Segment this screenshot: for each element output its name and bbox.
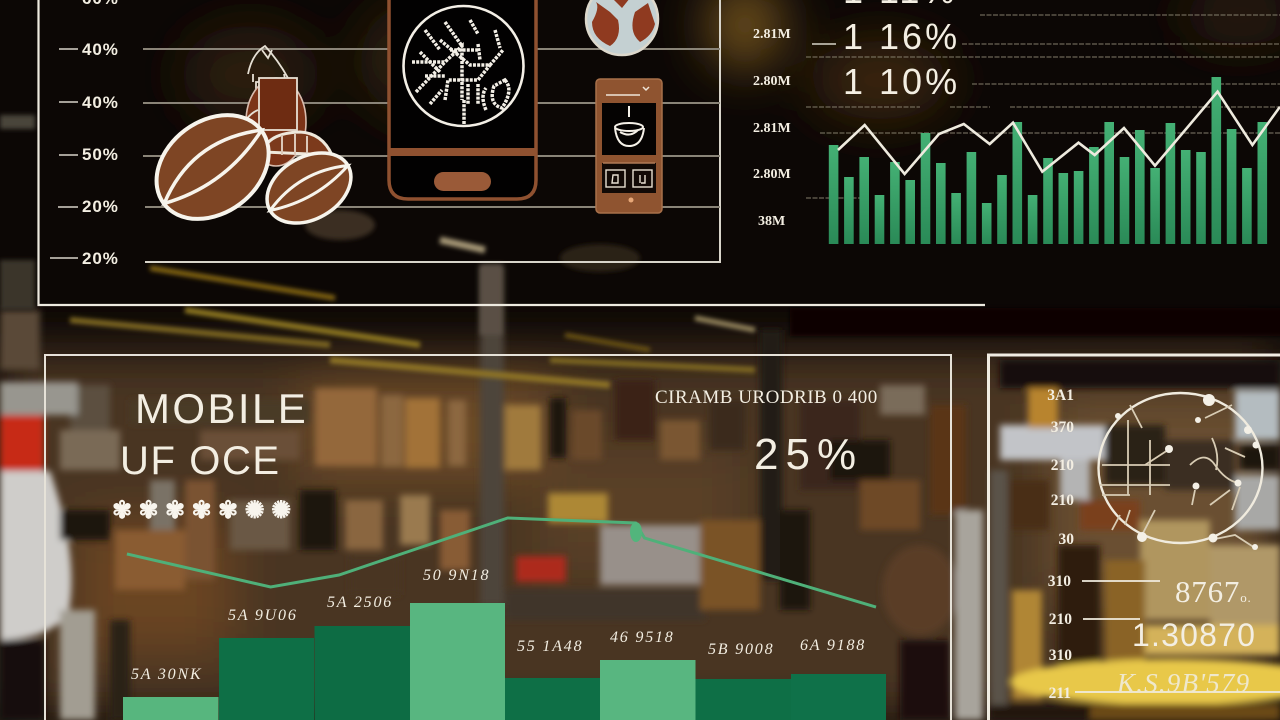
leader lines — [1075, 581, 1280, 692]
bar value labels — [131, 567, 866, 683]
right panel room — [1000, 360, 1280, 388]
percent readouts: 1 10% — [843, 61, 960, 102]
dashed grid lines — [806, 15, 1280, 198]
icon: coffee cup — [615, 106, 644, 146]
axis labels: 30 — [1058, 531, 1074, 548]
value readouts: 8767o. — [1175, 574, 1252, 609]
axis labels: 3A1 — [1047, 387, 1074, 404]
app tile right — [633, 170, 652, 187]
heading: MOBILE — [135, 385, 308, 432]
bar value labels: 5A 9U06 — [228, 607, 298, 624]
y axis labels — [753, 27, 791, 229]
grid lines and percent axis: 20% — [82, 249, 119, 268]
bar value labels: 46 9518 — [610, 629, 675, 646]
star rating: ✾✾✾✾✾✺✺ — [112, 496, 298, 524]
green trend line — [127, 518, 876, 607]
y axis labels: 2.80M — [753, 74, 791, 89]
percent readouts — [812, 0, 960, 102]
bar value labels: 5B 9008 — [708, 641, 774, 658]
icon: network globe — [1098, 393, 1262, 550]
bar value labels: 5A 30NK — [131, 666, 202, 683]
green bars — [829, 77, 1267, 244]
grid lines and percent axis: 20% — [82, 197, 119, 216]
bar value labels: 5A 2506 — [327, 594, 393, 611]
axis labels: 370 — [1051, 419, 1074, 436]
icon: small phone — [596, 79, 662, 213]
icon: large bean — [136, 93, 289, 240]
bar value labels: 55 1A48 — [517, 638, 583, 655]
icon: large phone — [389, 0, 536, 199]
phone lower panel — [602, 163, 656, 193]
icon: small bean — [255, 139, 363, 237]
value readouts — [1116, 574, 1256, 698]
y axis labels: 2.80M — [753, 167, 791, 182]
axis labels: 310 — [1048, 573, 1071, 590]
icon: pouring figure top — [248, 46, 288, 94]
grid lines and percent axis: 40% — [82, 93, 119, 112]
heading — [120, 385, 308, 483]
value readouts: 1.30870 — [1132, 617, 1256, 653]
callout: percentage: 25% — [754, 430, 863, 479]
chart frame — [145, 0, 720, 262]
chart: top right bars and line — [753, 0, 1280, 244]
bar value labels: 6A 9188 — [800, 637, 866, 654]
white trend line — [838, 92, 1280, 174]
grid lines and percent axis — [50, 0, 720, 268]
grid lines and percent axis: 50% — [82, 145, 119, 164]
grid lines and percent axis: 40% — [82, 40, 119, 59]
axis labels: 211 — [1049, 685, 1071, 702]
phone divider — [390, 148, 535, 156]
value readouts: K.S.9B'579 — [1116, 668, 1250, 698]
bar value labels: 50 9N18 — [423, 567, 490, 584]
chart: weekly bars — [123, 603, 886, 720]
callout: percentage — [655, 387, 878, 479]
panel: store network — [988, 355, 1280, 720]
icon: globe — [586, 0, 658, 55]
icon: coffee beans — [136, 46, 363, 240]
y axis labels: 2.81M — [753, 121, 791, 136]
y axis labels: 2.81M — [753, 27, 791, 42]
panel: mobile use — [45, 355, 951, 720]
axis labels: 210 — [1051, 492, 1074, 509]
app tile left — [606, 170, 625, 187]
icon: map circle — [404, 6, 524, 127]
heading: UF OCE — [120, 439, 281, 483]
axis labels: 310 — [1049, 647, 1072, 664]
phone screen — [602, 103, 656, 155]
axis labels: 210 — [1051, 457, 1074, 474]
phone button — [434, 172, 491, 191]
axis labels: 210 — [1049, 611, 1072, 628]
callout: percentage: CIRAMB URODRIB 0 400 — [655, 387, 878, 408]
ceiling light strips — [150, 268, 335, 298]
panel: market share frame — [38, 0, 985, 305]
y axis labels: 38M — [758, 214, 785, 229]
lower-room shapes — [0, 310, 40, 370]
percent readouts: 1 16% — [843, 16, 960, 57]
axis labels — [1047, 387, 1074, 702]
